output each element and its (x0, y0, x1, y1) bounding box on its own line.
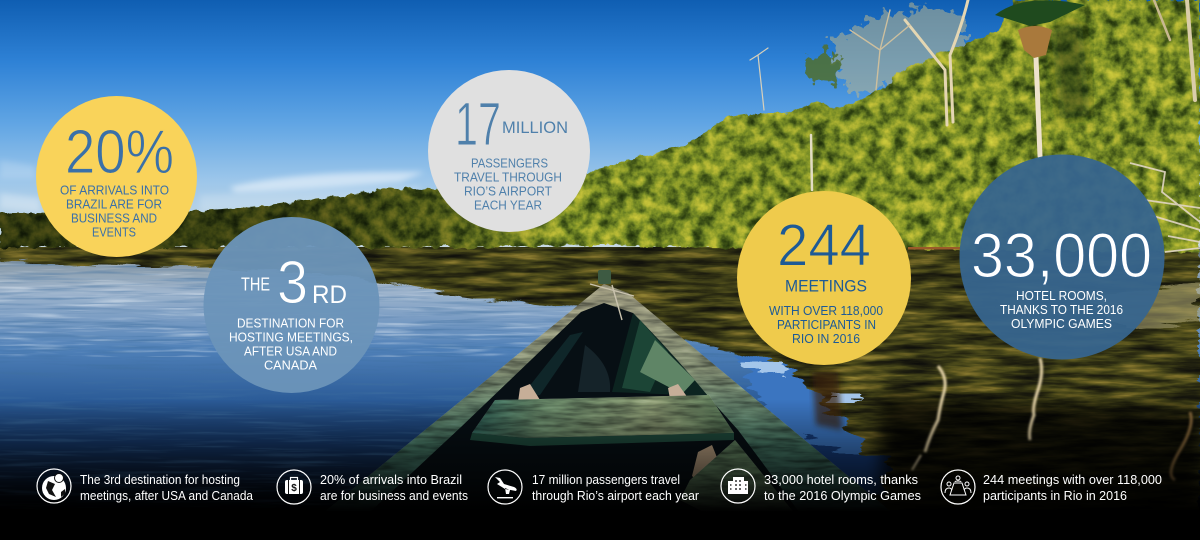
text: The 3rd destination for hosting (80, 472, 240, 487)
big number 20%: 20% (65, 118, 174, 187)
callout: the 3rd destination (204, 217, 380, 393)
inner hull details (518, 313, 722, 488)
description: RIO’S AIRPORT (464, 185, 552, 199)
hull planks (290, 284, 925, 540)
callout: 17 million passengers (428, 70, 590, 232)
text: 17 million passengers travel (532, 472, 680, 487)
text: to the 2016 Olympic Games (764, 488, 921, 503)
callout: 20% of arrivals (36, 96, 197, 257)
description: BUSINESS AND (71, 212, 157, 226)
text: are for business and events (320, 488, 468, 503)
callout: 33,000 hotel rooms (960, 154, 1164, 360)
description: EACH YEAR (474, 199, 542, 213)
description: CANADA (264, 359, 318, 373)
description: OF ARRIVALS INTO (60, 184, 169, 198)
icon: meeting table (941, 470, 975, 504)
description: PARTICIPANTS IN (777, 318, 876, 332)
text: through Rio’s airport each year (532, 488, 700, 503)
text: participants in Rio in 2016 (983, 488, 1127, 503)
text: 244 meetings with over 118,000 (983, 472, 1162, 487)
description: AFTER USA AND (244, 345, 337, 359)
description: BRAZIL ARE FOR (66, 198, 162, 212)
trunk reflections (912, 358, 1191, 480)
heading MEETINGS: MEETINGS (785, 278, 867, 296)
icon: money suitcase (277, 470, 311, 504)
description: OLYMPIC GAMES (1011, 317, 1112, 331)
footer item: 20% of arrivals (277, 470, 468, 504)
icon: money suitcase: $ (291, 483, 297, 494)
heading THE: THE (241, 274, 270, 294)
text: meetings, after USA and Canada (80, 488, 254, 503)
description: TRAVEL THROUGH (454, 171, 562, 185)
description: RIO IN 2016 (792, 332, 860, 346)
description: WITH OVER 118,000 (769, 304, 883, 318)
icon: landing plane (488, 470, 522, 504)
boat prow post (590, 270, 634, 320)
footer item: 33,000 hotel rooms (721, 469, 921, 503)
description: EVENTS (92, 226, 136, 240)
heading MILLION: MILLION (502, 118, 568, 137)
palm crown (995, 0, 1085, 58)
blue circle (960, 154, 1164, 360)
description: DESTINATION FOR (237, 317, 344, 331)
text: 20% of arrivals into Brazil (320, 472, 462, 487)
description: THANKS TO THE 2016 (1000, 303, 1123, 317)
grey circle (428, 70, 590, 232)
big number 3: 3 (277, 249, 308, 316)
wooden boat (290, 284, 925, 540)
text: 33,000 hotel rooms, thanks (764, 472, 918, 487)
big number 17: 17 (455, 90, 501, 158)
big number 244: 244 (777, 212, 871, 278)
heading RD: RD (312, 281, 347, 309)
description: HOSTING MEETINGS, (229, 331, 353, 345)
sky (0, 0, 1200, 250)
description: HOTEL ROOMS, (1016, 289, 1107, 303)
callout: 244 meetings (737, 191, 911, 365)
big number 33,000: 33,000 (971, 221, 1152, 291)
yellow circle (737, 191, 911, 365)
description: PASSENGERS (471, 157, 548, 171)
trees on the bank (750, 0, 1195, 190)
blue circle (204, 217, 380, 393)
footer item: 3rd destination (37, 469, 254, 503)
footer item: 17 million passengers (488, 470, 700, 504)
icon: globe with pin (37, 469, 71, 503)
bench (472, 395, 800, 540)
bank edge (908, 247, 960, 250)
jungle tree line (0, 0, 1200, 252)
tree reflections in water (0, 240, 1200, 520)
bottom dark fade (0, 400, 1200, 540)
shaded forest under the palm (1050, 20, 1090, 120)
icon: hotel building (721, 469, 755, 503)
fallen branches (1130, 163, 1200, 252)
yellow circle (36, 96, 197, 257)
pale tree crowns (805, 8, 965, 95)
boat interior (340, 303, 820, 540)
water (0, 247, 1200, 510)
clouds (0, 160, 425, 212)
footer item: 244 meetings (941, 470, 1162, 504)
